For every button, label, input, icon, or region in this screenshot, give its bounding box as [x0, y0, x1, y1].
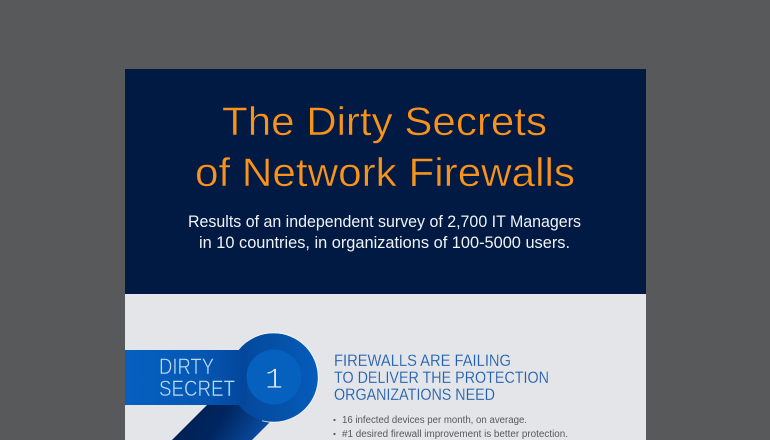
section heading: TO DELIVER THE PROTECTION	[334, 369, 549, 387]
outer circle	[229, 333, 318, 422]
ribbon	[172, 400, 275, 440]
title	[195, 100, 575, 195]
banner	[125, 350, 247, 405]
bullet list: #1 desired firewall improvement is better protection.	[342, 429, 568, 440]
header panel	[125, 69, 646, 294]
circle outline	[247, 333, 318, 422]
section heading: FIREWALLS ARE FAILING	[334, 352, 511, 370]
badge number: 1	[265, 364, 283, 398]
section heading: ORGANIZATIONS NEED	[334, 386, 495, 404]
panel: dirty secret 1	[125, 294, 646, 440]
title: The Dirty Secrets	[222, 100, 547, 144]
badge: dirty secret 1	[125, 333, 318, 440]
title: of Network Firewalls	[195, 151, 575, 195]
badge label: DIRTY	[159, 354, 214, 379]
section heading	[334, 352, 549, 404]
badge label	[159, 354, 235, 401]
subtitle: in 10 countries, in organizations of 100-5000 users.	[199, 233, 570, 252]
badge label: SECRET	[159, 376, 235, 401]
bullet list: 16 infected devices per month, on average.	[342, 415, 527, 426]
inner circle	[246, 350, 302, 404]
subtitle	[188, 212, 581, 252]
subtitle: Results of an independent survey of 2,700 IT Managers	[188, 212, 581, 231]
bullet list	[333, 415, 568, 440]
